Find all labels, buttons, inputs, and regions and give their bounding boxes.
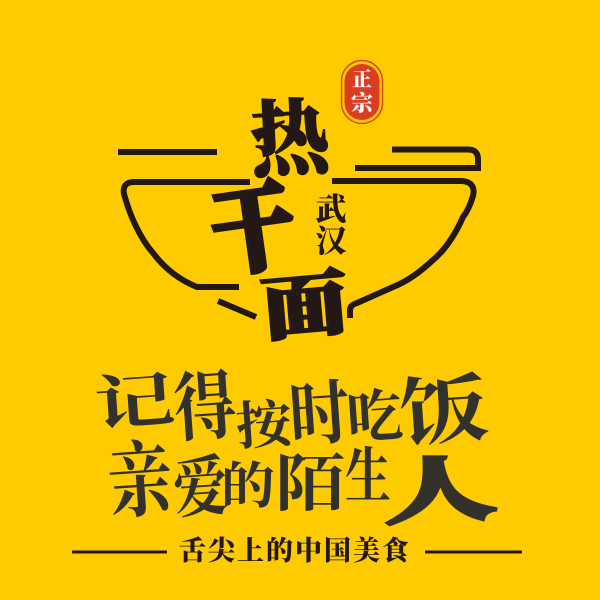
heading: 面: 面 xyxy=(258,264,352,351)
slogan line 1: 得 xyxy=(171,365,239,451)
slogan line 2: 的 xyxy=(221,460,275,515)
text: 武汉: 武 xyxy=(316,192,346,227)
heading: 热: 热 xyxy=(248,94,339,188)
icon: bowl outline xyxy=(118,150,478,318)
slogan line 2: 生 xyxy=(345,443,391,510)
slogan line 1: 吃 xyxy=(345,384,405,452)
slogan line 1: 饭 xyxy=(396,367,492,456)
slogan line 1: 记 xyxy=(92,368,177,439)
slogan line 1 xyxy=(92,365,492,456)
badge: 正宗: 正 xyxy=(352,68,372,91)
slogan line 1: 按 xyxy=(234,395,298,456)
badge: 正宗: 宗 xyxy=(351,91,375,116)
slogan line 2: 陌 xyxy=(275,451,345,519)
slogan line 2 xyxy=(105,433,498,534)
logo: bowl with noodle name xyxy=(118,60,478,351)
slogan line 1: 时 xyxy=(287,375,352,456)
slogan line 2: 亲 xyxy=(105,433,176,529)
slogan line 2: 爱 xyxy=(170,450,230,527)
text: 武汉 xyxy=(316,192,346,259)
tagline: 舌尖上的中国美食 xyxy=(179,535,411,566)
slogan line 2: 人 xyxy=(382,451,498,534)
heading: 干: 干 xyxy=(206,174,302,289)
badge: 正宗 xyxy=(342,60,382,124)
text: 武汉: 汉 xyxy=(316,224,346,259)
